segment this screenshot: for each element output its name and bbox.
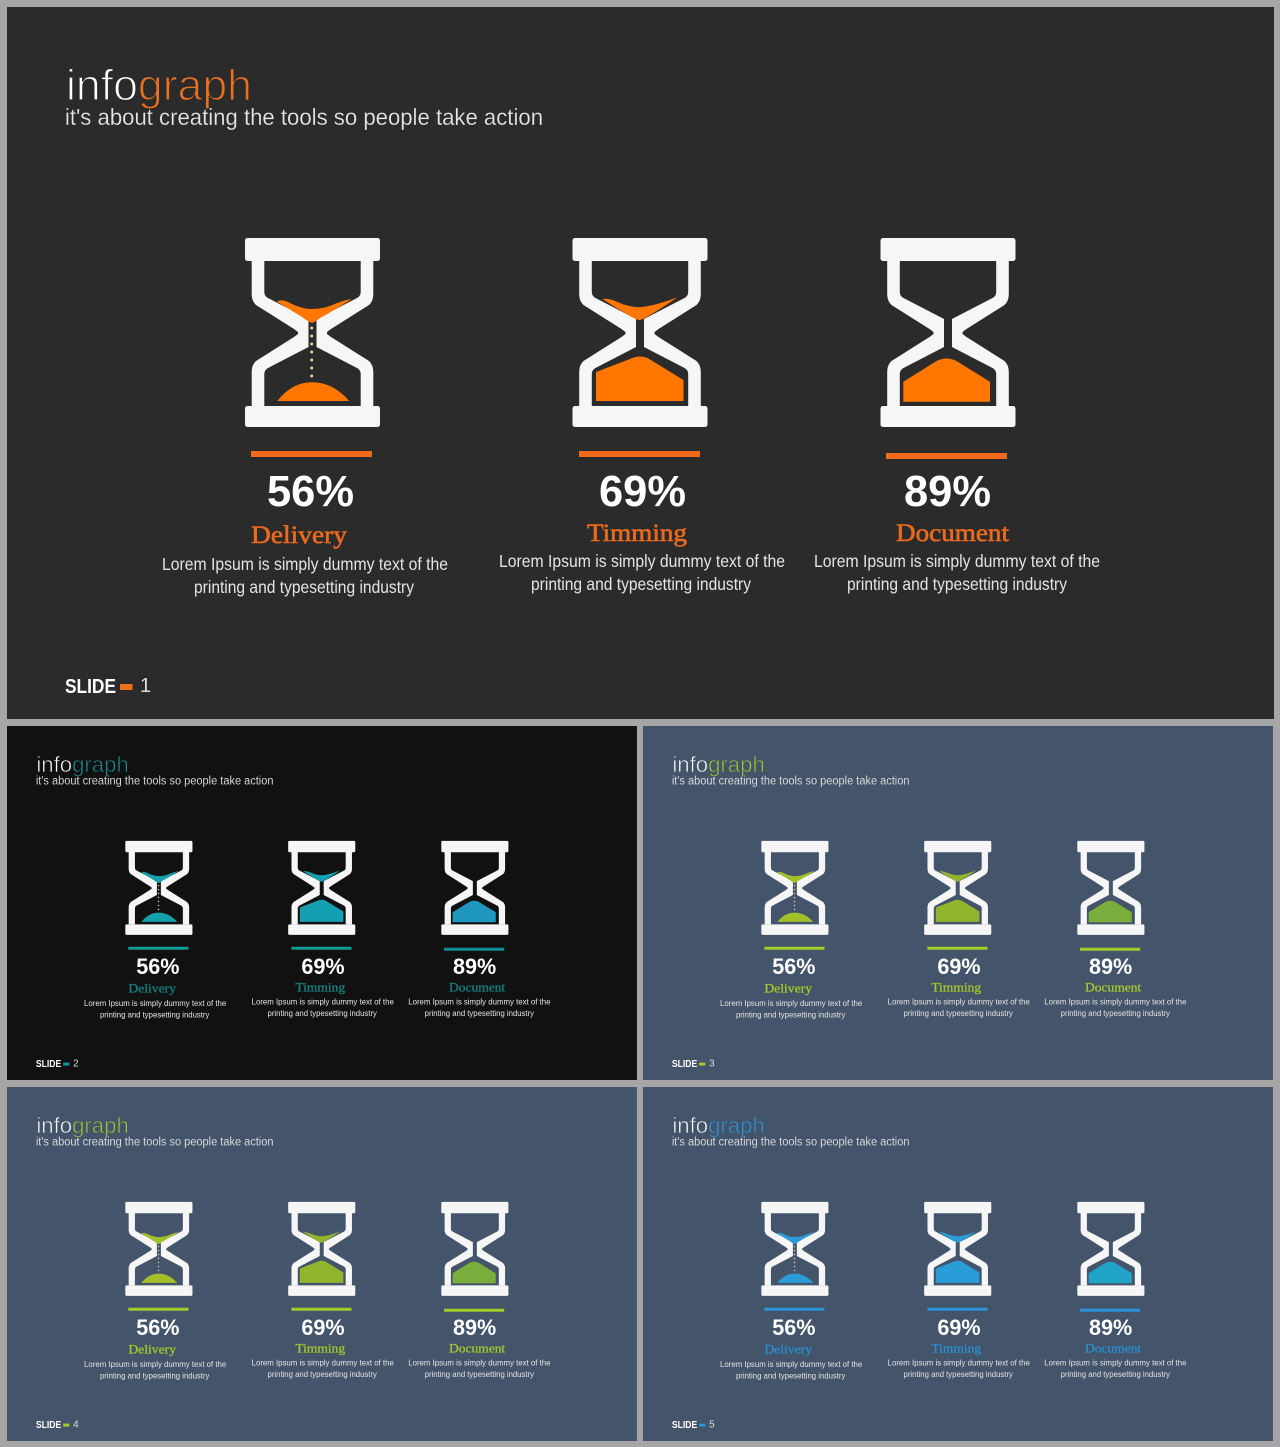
column: Document: Lorem Ipsum is simply dummy text of the [1044,996,1187,1006]
icon: hourglass 89% [880,238,1016,427]
title: infograph [36,752,129,777]
title: infograph [36,1113,129,1138]
column: Timming [252,947,394,1018]
column: Delivery: Delivery [128,981,177,995]
subtitle: it's about creating the tools so people take action [36,1136,273,1149]
column: Delivery: Delivery [764,1342,813,1356]
column: Delivery: 56% [136,954,180,979]
slide 4 background [7,1087,637,1441]
column: Timming: Lorem Ipsum is simply dummy text of the [888,1357,1030,1367]
slide number: 4 [73,1420,79,1431]
panel: slide 3 [643,726,1273,1080]
column: Document: 89% [453,1315,496,1340]
slide number: SLIDE [36,1059,62,1070]
column: Document: printing and typesetting industry [1061,1369,1171,1379]
column: Document: printing and typesetting industry [847,574,1067,594]
slide number [65,675,151,698]
column: Delivery [84,1308,226,1380]
slide number: 5 [709,1420,715,1431]
column: Document: 89% [904,467,991,516]
slide number [36,1420,79,1431]
column: Document: Lorem Ipsum is simply dummy text of the [408,996,551,1006]
panel: slide 2 [7,726,637,1080]
icon: hourglass 69% [572,238,708,427]
column: Delivery: 56% [136,1315,180,1340]
slide number: SLIDE [672,1059,698,1070]
column: Delivery [720,1308,862,1380]
column: Delivery [84,947,226,1019]
slide number: 2 [73,1059,79,1070]
column: Document: 89% [1089,1315,1132,1340]
column: Document: Lorem Ipsum is simply dummy text of the [408,1357,551,1367]
column: Document [814,453,1100,594]
column: Delivery: Delivery [764,981,813,995]
icon: hourglass 89% [441,841,508,935]
column: Timming: Timming [295,981,345,995]
column: Delivery: Lorem Ipsum is simply dummy text of the [162,554,448,574]
column: Timming [252,1308,394,1379]
column: Delivery: printing and typesetting industry [100,1370,210,1380]
column: Delivery: printing and typesetting industry [736,1370,846,1380]
icon: hourglass 56% [125,1202,192,1296]
column: Document [1044,1309,1187,1379]
slide number [672,1420,715,1431]
column: Delivery: 56% [772,1315,816,1340]
slide number: SLIDE [672,1420,698,1431]
column: Delivery: Lorem Ipsum is simply dummy text of the [84,998,226,1008]
column: Timming: printing and typesetting industry [268,1008,377,1018]
title: infograph [672,752,765,777]
column: Delivery: Lorem Ipsum is simply dummy text of the [84,1359,226,1369]
slide number [672,1059,715,1070]
column: Delivery: 56% [267,467,354,516]
column: Document [408,1309,551,1379]
panel: slide 4 [7,1087,637,1441]
column: Document [1044,948,1187,1018]
slide 1 background [7,7,1274,719]
column: Document: Lorem Ipsum is simply dummy text of the [1044,1357,1187,1367]
column: Timming: printing and typesetting industry [531,574,751,594]
subtitle: it's about creating the tools so people take action [65,104,543,130]
column: Delivery: printing and typesetting industry [194,577,414,597]
subtitle: it's about creating the tools so people take action [672,1136,909,1149]
column: Timming: Lorem Ipsum is simply dummy text of the [252,996,394,1006]
column: Timming: Lorem Ipsum is simply dummy text of the [499,551,785,571]
icon: hourglass 89% [1077,841,1144,935]
column: Document: Document [1085,981,1142,995]
slide number: SLIDE [65,676,116,698]
column: Document: printing and typesetting industry [425,1369,535,1379]
column: Timming: printing and typesetting industry [904,1369,1013,1379]
column: Document: 89% [453,954,496,979]
column: Timming [888,1308,1030,1379]
panel: slide 1 [7,7,1274,719]
column: Document: printing and typesetting industry [425,1008,535,1018]
slide number: 1 [140,675,151,697]
column: Timming: Lorem Ipsum is simply dummy text of the [252,1357,394,1367]
icon: hourglass 89% [441,1202,508,1296]
column: Timming: printing and typesetting industry [904,1008,1013,1018]
column: Delivery: Delivery [128,1342,177,1356]
column: Delivery: 56% [772,954,816,979]
subtitle: it's about creating the tools so people take action [672,775,909,788]
column: Document: Document [449,981,506,995]
icon: hourglass 56% [245,238,380,427]
column: Document: Document [449,1342,506,1356]
icon: hourglass 56% [125,841,192,935]
column: Delivery: Lorem Ipsum is simply dummy text of the [720,998,862,1008]
slide number: SLIDE [36,1420,62,1431]
slide 3 background [643,726,1273,1080]
title: infograph [66,61,252,110]
column: Timming: 69% [599,467,686,516]
icon: hourglass 56% [761,841,828,935]
column: Timming [888,947,1030,1018]
column: Delivery: Delivery [251,522,348,549]
column: Timming: Timming [931,981,981,995]
column: Delivery: Lorem Ipsum is simply dummy text of the [720,1359,862,1369]
column: Document: printing and typesetting industry [1061,1008,1171,1018]
icon: hourglass 69% [924,1202,991,1296]
column: Document: Document [896,520,1009,547]
subtitle: it's about creating the tools so people take action [36,775,273,788]
column: Document: 89% [1089,954,1132,979]
column: Document: Document [1085,1342,1142,1356]
slide 2 background [7,726,637,1080]
column: Timming: 69% [301,1315,345,1340]
title: infograph [672,1113,765,1138]
slide number: 3 [709,1059,715,1070]
column: Timming [499,451,785,594]
icon: hourglass 69% [288,1202,355,1296]
slide 5 background [643,1087,1273,1441]
column: Timming: Lorem Ipsum is simply dummy text of the [888,996,1030,1006]
column: Document [408,948,551,1018]
column: Delivery [162,451,448,597]
column: Timming: Timming [295,1342,345,1356]
column: Timming: Timming [587,520,688,547]
slide number [36,1059,79,1070]
column: Timming: 69% [937,954,981,979]
column: Timming: 69% [301,954,345,979]
column: Timming: Timming [931,1342,981,1356]
column: Document: Lorem Ipsum is simply dummy text of the [814,551,1100,571]
column: Timming: printing and typesetting industry [268,1369,377,1379]
column: Delivery: printing and typesetting industry [100,1009,210,1019]
panel: slide 5 [643,1087,1273,1441]
icon: hourglass 89% [1077,1202,1144,1296]
column: Timming: 69% [937,1315,981,1340]
icon: hourglass 69% [924,841,991,935]
icon: hourglass 56% [761,1202,828,1296]
column: Delivery [720,947,862,1019]
icon: hourglass 69% [288,841,355,935]
column: Delivery: printing and typesetting industry [736,1009,846,1019]
